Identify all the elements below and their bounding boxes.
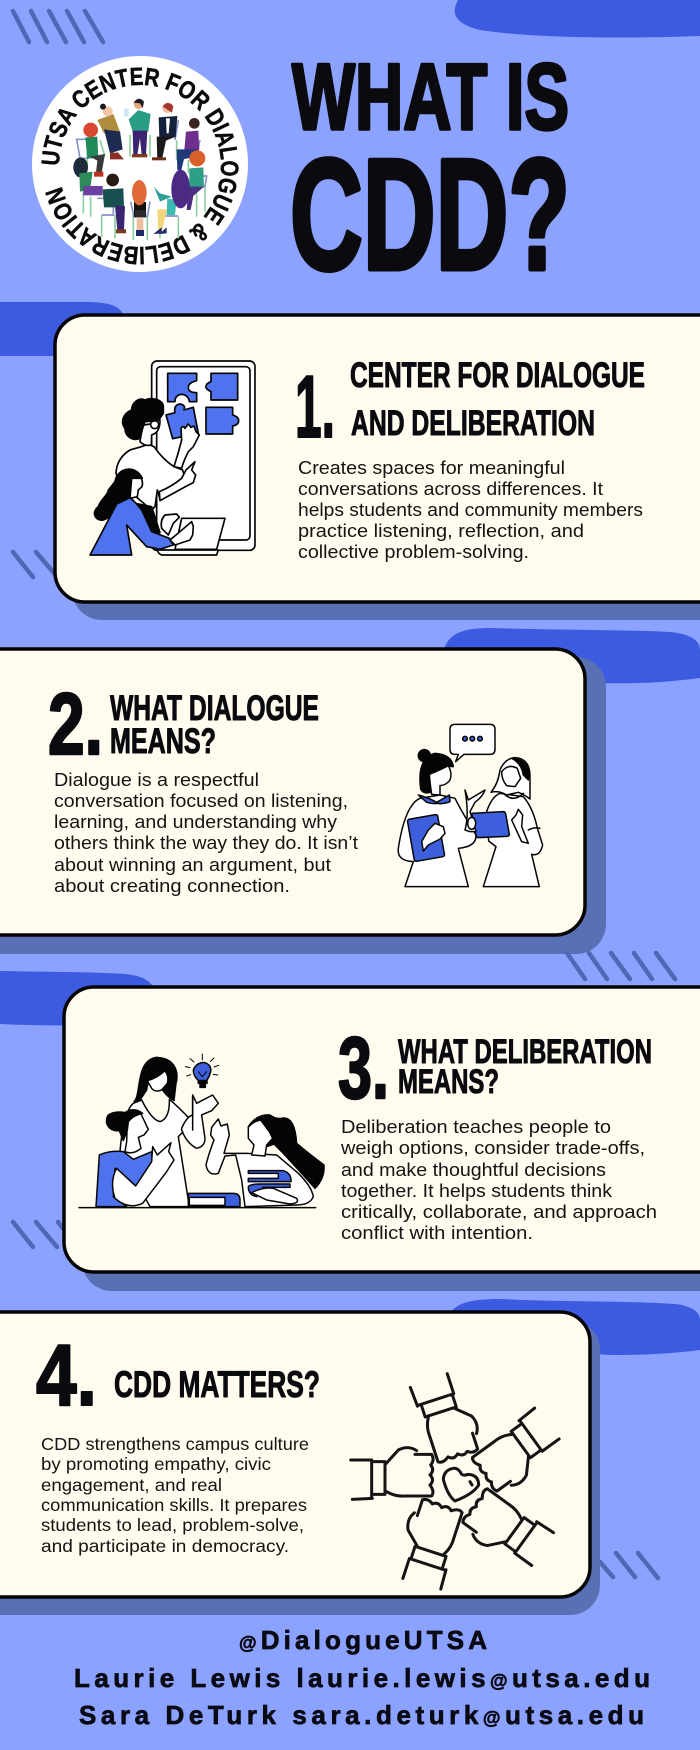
person: olive sweater [97,104,124,159]
decorative blob: top right [455,0,700,38]
body text 2: Dialogue is a respectful [54,769,259,790]
body text 4: students to lead, problem-solve, [41,1515,304,1535]
person: laptop [73,157,103,195]
panel 3: what deliberation means [64,987,700,1291]
decorative slashes: left of card 3 [13,1222,72,1247]
person: long orange hair [132,180,147,236]
card 3 shadow [82,1000,700,1291]
numeral 2: 2. [48,676,103,773]
body text 4: CDD strengthens campus culture [41,1434,309,1454]
body text 1: conversations across differences. It [298,478,603,499]
heading 2: WHAT DIALOGUE [110,689,319,728]
body text 3: and make thoughtful decisions [341,1159,606,1180]
body text 1: practice listening, reflection, and [298,520,584,541]
body text 1: helps students and community members [298,499,643,520]
decorative slashes: top left [13,11,103,42]
body text 3: together. It helps students think [341,1180,613,1201]
panel 1: center for dialogue and deliberation [55,315,700,620]
illustration: two people solving a puzzle [90,361,255,555]
card 3 face [64,987,700,1272]
card 4 face [0,1312,590,1597]
body text 4: communication skills. It prepares [41,1495,307,1515]
body text 3: weigh options, consider trade-offs, [340,1137,645,1158]
card 1 face [55,315,700,602]
body text 2: others think the way they do. It isn’t [54,832,358,853]
heading 4: CDD MATTERS? [114,1364,320,1405]
logo: people in a circle [73,99,207,240]
body text 4: engagement, and real [41,1475,222,1495]
speech bubble [450,724,495,762]
person: green sweater [103,174,126,233]
person: purple top [177,118,200,170]
body text 2 [54,769,358,896]
title [290,44,570,303]
person: red curly hair [83,123,105,177]
social handle: @DialogueUTSA [239,1625,487,1655]
body text 4 [41,1434,309,1556]
decorative blob: behind card 1 [0,302,124,356]
numeral 4: 4. [36,1327,97,1424]
heading 3: MEANS? [398,1063,499,1101]
body text 3 [340,1116,657,1243]
decorative slashes: right of card 4 [600,1553,658,1578]
person: teal sweater [124,99,151,157]
decorative slashes: right of card 2 [567,953,675,979]
body text 2: about creating connection. [54,875,290,896]
body text 3: critically, collaborate, and approach [341,1201,657,1222]
body text 3: conflict with intention. [341,1222,533,1243]
illustration: five fists around a heart [351,1370,566,1591]
body text 2: learning, and understanding why [54,811,338,832]
logo: UTSA Center for Dialogue and Deliberation [32,56,248,272]
card 2 face [0,649,585,935]
contact footer [74,1625,650,1730]
panel 2: what dialogue means [0,649,606,954]
decorative blob: behind card 2 [444,628,700,683]
contact: Sara DeTurk: Sara DeTurk sara.deturk @utsa.edu [79,1700,644,1730]
heading 1 [350,356,645,443]
numeral 3: 3. [338,1020,389,1117]
body text 3: Deliberation teaches people to [341,1116,611,1137]
card 4 shadow [0,1320,600,1615]
numeral 1: 1. [295,357,335,456]
person: navy suit [152,103,177,160]
heading 2 [110,689,319,761]
heading 2: MEANS? [110,722,216,761]
person: orange hair [187,150,205,210]
body text 1: Creates spaces for meaningful [298,457,565,478]
card 2 shadow [0,657,606,954]
body text 1: collective problem-solving. [298,541,529,562]
decorative blob: behind card 3 [0,971,156,1026]
card 1 shadow [72,330,700,620]
logo ring text: UTSA CENTER FOR DIALOGUE & DELIBERATION [41,67,239,265]
decorative blob: behind card 4 [451,1299,700,1355]
contact: Laurie Lewis: Laurie Lewis laurie.lewis@utsa.edu [74,1663,650,1693]
icon: heart [443,1468,479,1501]
body text 1 [298,457,643,562]
body text 4: and participate in democracy. [41,1536,289,1556]
illustration: two women talking with tablets [398,724,543,887]
title line 1: WHAT IS [292,44,569,149]
icon: lightbulb [185,1054,219,1087]
chair legs [83,135,205,240]
illustration: three students with a lightbulb idea [79,1054,324,1208]
person: purple hair [153,170,190,234]
heading 1: AND DELIBERATION [351,404,595,443]
panel 4: why CDD matters [0,1312,600,1615]
body text 2: about winning an argument, but [54,854,331,875]
body text 2: conversation focused on listening, [54,790,348,811]
heading 3 [398,1033,652,1101]
body text 4: by promoting empathy, civic [41,1454,271,1474]
decorative slashes: left of card 1 [13,552,60,580]
